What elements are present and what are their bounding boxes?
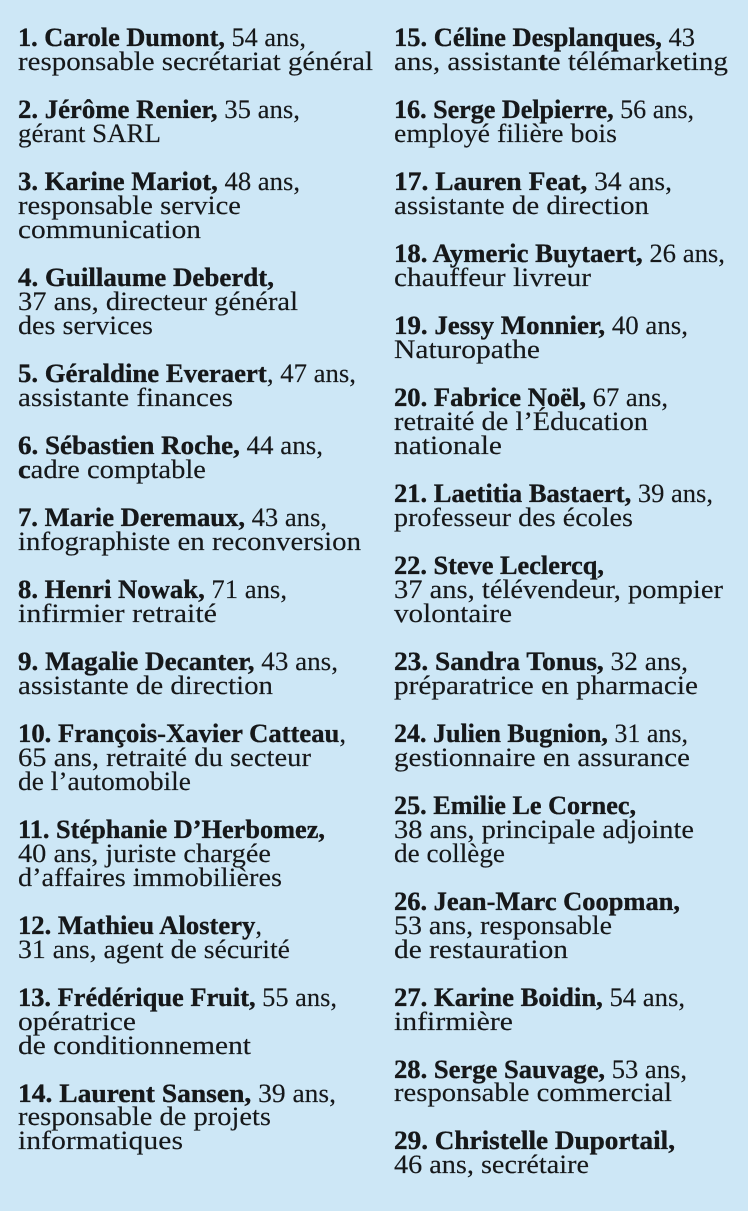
entry 20: retraité de l’Éducation <box>394 406 648 436</box>
entry 22 <box>394 550 723 628</box>
entry 12 <box>18 910 290 964</box>
entry 24 <box>394 718 690 772</box>
entry 2 <box>18 94 300 148</box>
entry 20: 20. Fabrice Noël, 67 ans, <box>394 382 668 412</box>
entry 23: 23. Sandra Tonus, 32 ans, <box>394 646 688 676</box>
panel: right column <box>394 22 728 1179</box>
entry 2: gérant SARL <box>18 118 161 148</box>
entry 10 <box>18 718 346 796</box>
entry 26 <box>394 886 680 964</box>
entry 17: 17. Lauren Feat, 34 ans, <box>394 166 672 196</box>
entry 22: 37 ans, télévendeur, pompier <box>394 574 723 604</box>
entry 23 <box>394 646 698 700</box>
entry 26: 53 ans, responsable <box>394 910 612 940</box>
entry 8: 8. Henri Nowak, 71 ans, <box>18 574 287 604</box>
entry 13: de conditionnement <box>18 1030 252 1060</box>
entry 10: de l’automobile <box>18 766 191 796</box>
entry 26: de restauration <box>394 934 568 964</box>
entry 13 <box>18 982 337 1060</box>
entry 20 <box>394 382 668 460</box>
entry 10: 65 ans, retraité du secteur <box>18 742 311 772</box>
entry 4: 37 ans, directeur général <box>18 286 298 316</box>
entry 9: 9. Magalie Decanter, 43 ans, <box>18 646 338 676</box>
entry 8: infirmier retraité <box>18 598 217 628</box>
entry 5 <box>18 358 356 412</box>
entry 22: 22. Steve Leclercq, <box>394 550 604 580</box>
entry 29 <box>394 1125 675 1179</box>
entry 29: 46 ans, secrétaire <box>394 1149 589 1179</box>
entry 27 <box>394 982 685 1036</box>
entry 3: responsable service <box>18 190 241 220</box>
entry 21 <box>394 478 713 532</box>
entry 28: responsable commercial <box>394 1077 672 1107</box>
entry 15: 15. Céline Desplanques, 43 <box>394 22 695 52</box>
entry 7: infographiste en reconversion <box>18 526 361 556</box>
entry 29: 29. Christelle Duportail, <box>394 1125 675 1155</box>
entry 21: professeur des écoles <box>394 502 633 532</box>
entry 21: 21. Laetitia Bastaert, 39 ans, <box>394 478 713 508</box>
entry 2: 2. Jérôme Renier, 35 ans, <box>18 94 300 124</box>
entry 3: 3. Karine Mariot, 48 ans, <box>18 166 300 196</box>
entry 19: 19. Jessy Monnier, 40 ans, <box>394 310 688 340</box>
entry 23: préparatrice en pharmacie <box>394 670 698 700</box>
entry 19 <box>394 310 688 364</box>
entry 13: 13. Frédérique Fruit, 55 ans, <box>18 982 337 1012</box>
entry 18: 18. Aymeric Buytaert, 26 ans, <box>394 238 725 268</box>
entry 4 <box>18 262 298 340</box>
entry 4: 4. Guillaume Deberdt, <box>18 262 274 292</box>
entry 14: 14. Laurent Sansen, 39 ans, <box>18 1078 336 1108</box>
entry 27: infirmière <box>394 1006 513 1036</box>
entry 13: opératrice <box>18 1006 136 1036</box>
entry 6: 6. Sébastien Roche, 44 ans, <box>18 430 323 460</box>
entry 11 <box>18 814 325 892</box>
entry 25: 38 ans, principale adjointe <box>394 814 694 844</box>
panel: left column <box>18 22 373 1155</box>
entry 18 <box>394 238 725 292</box>
entry 3 <box>18 166 300 244</box>
entry 14 <box>18 1078 336 1155</box>
entry 15 <box>394 22 728 76</box>
entry 9: assistante de direction <box>18 670 273 700</box>
entry 11: 40 ans, juriste chargée <box>18 838 271 868</box>
entry 16: 16. Serge Delpierre, 56 ans, <box>394 94 694 124</box>
entry 12: 12. Mathieu Alostery, <box>18 910 262 940</box>
entry 18: chauffeur livreur <box>394 262 591 292</box>
entry 1 <box>18 22 373 76</box>
entry 24: 24. Julien Bugnion, 31 ans, <box>394 718 688 748</box>
entry 22: volontaire <box>394 598 512 628</box>
entry 10: 10. François-Xavier Catteau, <box>18 718 346 748</box>
entry 16 <box>394 94 694 148</box>
entry 1: 1. Carole Dumont, 54 ans, <box>18 22 306 52</box>
entry 16: employé filière bois <box>394 118 617 148</box>
entry 3: communication <box>18 214 201 244</box>
entry 14: responsable de projets <box>18 1101 271 1131</box>
entry 24: gestionnaire en assurance <box>394 742 690 772</box>
entry 5: assistante finances <box>18 382 233 412</box>
entry 14: informatiques <box>18 1125 183 1155</box>
entry 11: 11. Stéphanie D’Herbomez, <box>18 814 325 844</box>
entry 20: nationale <box>394 430 502 460</box>
entry 5: 5. Géraldine Everaert, 47 ans, <box>18 358 356 388</box>
entry 9 <box>18 646 338 700</box>
entry 6 <box>18 430 323 484</box>
entry 7 <box>18 502 361 556</box>
entry 19: Naturopathe <box>394 334 540 364</box>
entry 6: cadre comptable <box>18 454 206 484</box>
entry 17: assistante de direction <box>394 190 649 220</box>
entry 1: responsable secrétariat général <box>18 46 373 76</box>
entry 4: des services <box>18 310 153 340</box>
entry 25: 25. Emilie Le Cornec, <box>394 790 636 820</box>
entry 25: de collège <box>394 838 505 868</box>
entry 11: d’affaires immobilières <box>18 862 282 892</box>
entry 17 <box>394 166 672 220</box>
entry 27: 27. Karine Boidin, 54 ans, <box>394 982 685 1012</box>
entry 25 <box>394 790 694 868</box>
entry 28 <box>394 1054 687 1107</box>
entry 15: ans, assistan te télémarketing <box>394 46 728 76</box>
entry 26: 26. Jean-Marc Coopman, <box>394 886 680 916</box>
entry 8 <box>18 574 287 628</box>
entry 7: 7. Marie Deremaux, 43 ans, <box>18 502 327 532</box>
entry 12: 31 ans, agent de sécurité <box>18 934 290 964</box>
entry 28: 28. Serge Sauvage, 53 ans, <box>394 1054 687 1084</box>
